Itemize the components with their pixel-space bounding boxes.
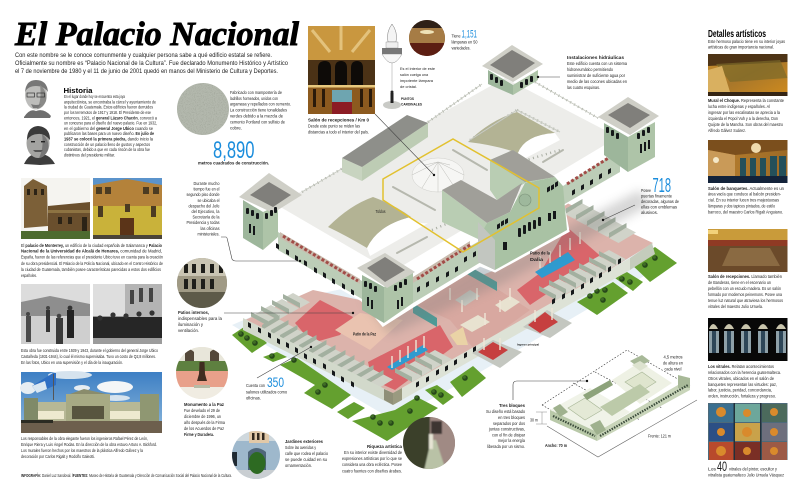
text: despacho del Ejecutivo: las oficinas bbox=[200, 226, 220, 231]
pools bbox=[387, 345, 428, 370]
caption: vitrales bbox=[708, 364, 781, 398]
text: instalaciones hidráulicas bbox=[567, 55, 627, 90]
stat: 40 vitrales: vitralista guatemalteco Julio Urruela Vásquez bbox=[708, 472, 784, 478]
balustrades bbox=[302, 82, 598, 263]
text: tres bloques: en tres bloques bbox=[498, 415, 526, 420]
label: altura por nivel: cada nivel bbox=[664, 366, 682, 372]
text: instalaciones hidráulicas: suministrar de suficiente agua por bbox=[567, 73, 625, 78]
stat: 1,151 lámparas: variedades. bbox=[452, 46, 470, 51]
photo: riqueza artística bbox=[403, 417, 455, 469]
cutaway illustration: ground floor bbox=[232, 199, 677, 441]
panel: historia: publicaron las bases para un nuevo diseño. En julio de bbox=[64, 131, 154, 136]
panel: historia: entonces, 1921, el general Lázaro Chacón, convocó a bbox=[64, 115, 157, 120]
text: monumento a la paz: año después de la Firma bbox=[184, 420, 225, 426]
title: El Palacio Nacional bbox=[14, 16, 300, 53]
front left wall bbox=[278, 232, 362, 299]
stat: 40 vitrales bbox=[708, 458, 784, 478]
rear rooms bbox=[261, 305, 288, 320]
caption: salón de banquetes: área vacía que conduce al balcón presiden- bbox=[708, 192, 781, 196]
caption: vitrales: orden, instrucción, fortaleza y progreso. bbox=[708, 394, 776, 398]
panel: historia bbox=[64, 86, 157, 157]
caption: salón de banquetes bbox=[708, 186, 785, 214]
text: despacho del Ejecutivo: Secretaría de la bbox=[192, 215, 220, 220]
photo: salón de recepciones bbox=[708, 229, 788, 272]
label: patio de la dalia: Dalia bbox=[530, 257, 544, 262]
panel: historia: un concurso para el diseño del nuevo palacio. Fue en 1932, bbox=[64, 121, 157, 126]
text: tres bloques: separados por dos bbox=[493, 421, 526, 426]
stat: 350 salones: Cuenta con bbox=[246, 383, 266, 388]
text: riqueza artística: En su interior existe diversidad de bbox=[344, 450, 402, 455]
panel: historia: en el gobierno del general Jorge Ubico cuando se bbox=[64, 126, 153, 131]
text: patios internos: Patios internos, bbox=[178, 310, 209, 315]
photo: fachada del Palacio Nacional bbox=[20, 371, 162, 433]
text: instalaciones hidráulicas: Este edificio cuenta con un sistema bbox=[567, 61, 627, 66]
photo: vitrales bbox=[708, 318, 788, 361]
text: despacho del Ejecutivo: del Ejecutivo, la bbox=[192, 209, 220, 214]
portrait: general Jorge Ubico bbox=[24, 126, 55, 165]
text: construcción 1939-1943 bbox=[21, 348, 158, 365]
cutaway illustration: upper floor bbox=[239, 45, 659, 335]
portrait: general Lázaro Chacón bbox=[24, 80, 51, 118]
dome bbox=[412, 158, 464, 192]
label: ingreso principal: Ingreso principal bbox=[517, 342, 539, 346]
photo: lámpara circle bbox=[409, 20, 445, 56]
text: construcción 1939-1943: En las fotos, Ubico en una supervisión y el día de la inauguración. bbox=[21, 360, 123, 365]
photo: Universidad de Alcalá bbox=[93, 178, 162, 239]
red corridors left bbox=[295, 300, 353, 343]
panel: historia: construcción de un palacio lleno de gustos y aspectos bbox=[64, 142, 151, 147]
text: construcción 1939-1943: Castañeda (1931-1944), lo cual él mismo supervisaba. Tuvo un costo de Q2,8 millones. bbox=[21, 354, 156, 359]
intro text: Con este nombre se le conoce comunmente y cualquier persona sabe a qué edificio estatal se refiere. bbox=[15, 52, 272, 59]
text: mampostería bbox=[230, 90, 291, 130]
diagram: small 3D model with dimensions bbox=[530, 350, 697, 457]
right wing rooms bbox=[395, 367, 422, 382]
photo: mural el Choque bbox=[708, 54, 788, 96]
diagram: small 3D model with dimensions: Frente: 121 m bbox=[648, 434, 671, 438]
intro text bbox=[15, 52, 289, 75]
slab shadow bbox=[362, 190, 650, 335]
label: altura por nivel bbox=[663, 354, 684, 372]
panel: historia: la ciudad de Guatemala. Estos edificios fueron derruidos bbox=[64, 105, 154, 110]
text: riqueza artística: expresiones artísticas por lo que se bbox=[342, 456, 402, 461]
photo: salón de recepciones km 0 bbox=[308, 26, 375, 114]
stat: 8,890: metros cuadrados de construcción. bbox=[198, 160, 269, 166]
stat: 40 vitrales: Los bbox=[708, 466, 717, 472]
text: instalaciones hidráulicas: las cuatro esquinas. bbox=[567, 85, 600, 90]
caption: vitrales: labor, justicia, peridad, concordancia, bbox=[708, 388, 772, 392]
text: mampostería: argamasa y repellados con cemento. bbox=[230, 102, 291, 107]
caption: salón de recepciones: vitrales del maestro Julio Urruela. bbox=[708, 304, 763, 309]
caption: salón de recepciones km 0 bbox=[308, 118, 370, 134]
main entrance bbox=[472, 308, 572, 368]
text: jardines exteriores: Jardines exteriores bbox=[285, 439, 324, 444]
stat: 8,890: 8,890 bbox=[213, 137, 254, 164]
caption: vitrales: relacionados con la herencia guatemalteca. bbox=[708, 370, 781, 375]
upper windows bbox=[276, 168, 611, 296]
toldos bbox=[328, 197, 411, 248]
text: riqueza artística bbox=[342, 444, 403, 474]
text: tres bloques: liberada por un sismo. bbox=[487, 444, 525, 449]
white cut outline bbox=[275, 75, 640, 325]
stat: 718 puertas: puertas finamente bbox=[641, 194, 673, 198]
footer credits: INFOGRAFÍA: Daniel Luz Sandoval. /FUENTES: Museo de Historia de Guatemala y Dirección de Comunicación Social del Palacio Nacional de la Cultura. bbox=[21, 473, 232, 478]
central block bbox=[442, 150, 567, 270]
text: patios internos: indispensables para la bbox=[178, 316, 223, 321]
text: patios internos: ventilación. bbox=[178, 328, 199, 333]
right corridors bbox=[517, 227, 607, 305]
caption: salón de recepciones bbox=[708, 274, 784, 309]
panel: detalles artísticos bbox=[708, 28, 788, 478]
caption: mural el Choque bbox=[708, 98, 784, 133]
text: jardines exteriores: se puede cuidad en su bbox=[285, 457, 328, 462]
hall bbox=[413, 270, 530, 350]
panel: historia: cubanistas, debido a que en cada rincón de la obra fue bbox=[64, 147, 150, 152]
text: tres bloques: juntas constructivas, bbox=[488, 426, 525, 432]
caption: vitrales: Los vitrales. Relatan acontecimientos bbox=[708, 364, 775, 369]
dimension labels: 30 m bbox=[530, 418, 538, 422]
caption: salón de recepciones: Salón de recepciones. Llamado también bbox=[708, 274, 783, 279]
left tower bbox=[239, 173, 302, 250]
stat: 350 salones: oficinas. bbox=[246, 396, 261, 400]
photo: salón de banquetes bbox=[708, 140, 788, 183]
text: construcción 1939-1943: Esta obra fue construida entre 1939 y 1943, durante el gobierno del general Jorge Ubico bbox=[21, 348, 158, 353]
text: monumento a la paz: Firme y Duradera. bbox=[184, 432, 214, 438]
text: jardines exteriores bbox=[285, 439, 328, 468]
label: altura por nivel: de altura en bbox=[663, 360, 684, 366]
text: despacho del Ejecutivo: segundo piso donde bbox=[186, 192, 220, 197]
label: puntos cardinales: PUNTOS bbox=[401, 97, 415, 101]
text: mampostería: cobre. bbox=[230, 126, 242, 130]
text: referencias bbox=[21, 243, 163, 278]
text: mampostería: La construcción tiene tonalidades bbox=[230, 108, 288, 112]
text: despacho del Ejecutivo: despacho del Jefe bbox=[188, 203, 220, 208]
caption: vitrales: banquetes representan las virtudes: paz, bbox=[708, 382, 777, 387]
text: responsables de la obra bbox=[21, 436, 157, 459]
text: riqueza artística: Riqueza artística bbox=[367, 444, 403, 449]
caption: mural el Choque: Mural el Choque. Representa la constante bbox=[708, 98, 784, 103]
text: lámpara de cristal: de cristal. bbox=[400, 84, 417, 89]
caption: salón de recepciones: tenue luz natural que atraviesa los hermosos bbox=[708, 298, 784, 303]
right tower bbox=[598, 97, 659, 172]
diagram: small 3D model with dimensions: Ancho: 70 m bbox=[545, 443, 567, 448]
stat: 1,151 lámparas: Tiene bbox=[452, 34, 461, 38]
text: monumento a la paz: Fue develado el 29 de bbox=[184, 408, 220, 414]
pavement tint bbox=[232, 232, 668, 420]
text: instalaciones hidráulicas: medio de las cocones ubicadas en bbox=[567, 79, 627, 84]
label: puntos cardinales bbox=[401, 97, 423, 106]
text: lámpara de cristal bbox=[400, 66, 435, 89]
text: mampostería: ladrillos horneados, unidos con bbox=[230, 96, 278, 101]
text: despacho del Ejecutivo: Presidencia y todas bbox=[186, 220, 220, 225]
roof slab bbox=[277, 78, 618, 272]
text: mampostería: verdes debido a la mezcla de bbox=[230, 114, 284, 118]
heading: detalles artísticos: Detalles artísticos bbox=[708, 28, 766, 40]
bottom tower bbox=[357, 253, 415, 323]
stat: 1,151 lámparas bbox=[452, 28, 478, 51]
label: altura por nivel: 4,5 metros bbox=[664, 354, 682, 360]
top tower bbox=[482, 45, 543, 95]
stat: 350 salones: salones utilizados como bbox=[246, 389, 288, 394]
text: jardines exteriores: calle que rodea el palacio bbox=[285, 451, 328, 456]
text: responsables de la obra: Los murales fueron hechos por los maestros de la plástica Alfredo Gálvez y la bbox=[21, 448, 143, 453]
text: riqueza artística: considera una obra ecléctica. Posee bbox=[342, 462, 402, 467]
stat: 350 salones: 350 bbox=[267, 374, 284, 390]
panel: historia: arquitectónica, se encontraba la cárcel y ayuntamiento de bbox=[64, 99, 156, 104]
skylight strips bbox=[393, 150, 563, 253]
text: tres bloques bbox=[486, 403, 526, 449]
leader lines bbox=[221, 76, 635, 400]
caption: salón de recepciones km 0: Salón de recepciones / Km 0 bbox=[308, 118, 370, 122]
stat: 350 salones bbox=[246, 374, 288, 400]
caption: vitrales: Otros vitrales, ubicados en el salón de bbox=[708, 376, 774, 381]
front walls bbox=[243, 318, 393, 405]
text: monumento a la paz: diciembre de 1996, un bbox=[184, 414, 221, 420]
stat: 1,151 lámparas: lámparas en 50 bbox=[452, 40, 478, 45]
text: patios internos: iluminación y bbox=[178, 322, 204, 327]
text: responsables de la obra: decoración por Carlos Rigalt y Rodolfo Galeotti. bbox=[21, 454, 95, 459]
photo: vitrales grid bbox=[708, 403, 788, 460]
caption: salón de banquetes: cial. En su interior lucen tres majestuosas bbox=[708, 198, 780, 202]
stat: 718 puertas: alusivos. bbox=[641, 210, 658, 215]
photo: stone texture circle bbox=[177, 83, 229, 135]
label: puntos cardinales: CARDINALES bbox=[401, 102, 423, 106]
caption: salón de recepciones: pebellón con un escudo madera. Es un salón bbox=[708, 286, 781, 291]
photo: día de la inauguración bbox=[93, 284, 162, 344]
text: jardines exteriores: Sobre las avenidas y bbox=[285, 445, 317, 450]
text: referencias: Nacional de la Universidad de Alcalá de Henares, comunidad de Madrid, bbox=[21, 248, 162, 254]
caption: salón de recepciones: formado por modernos peinemons. Posee una bbox=[708, 292, 782, 297]
caption: salón de banquetes: lámparas y dos tapices pintados, de estilo bbox=[708, 204, 775, 208]
stat: 40 vitrales: 40 bbox=[717, 458, 727, 474]
text: lámpara de cristal: salón cuelga una bbox=[400, 72, 429, 77]
floor slab bbox=[245, 203, 653, 403]
stat: 718 puertas: decoradas, algunas de bbox=[641, 199, 680, 204]
panel: detalles artísticos: Este hermoso palacio tiene en su interior joyas bbox=[708, 39, 786, 44]
caption: salón de banquetes: barroco, del maestro Carlos Rigalt Anguiano. bbox=[708, 210, 783, 214]
panel: historia: 1937 se colocó la primera piedra, dando inicio la bbox=[64, 136, 154, 142]
text: referencias: de su obra presidencial. El Palacio de la Policía Nacional, ubicado en el Centro Histórico de bbox=[21, 261, 163, 266]
heading: historia: Historia bbox=[64, 86, 93, 95]
label: patio de la paz: Patio de la Paz bbox=[353, 332, 376, 336]
text: tres bloques: Tres bloques bbox=[499, 403, 526, 408]
gardens bbox=[232, 247, 677, 441]
stat: 8,890 bbox=[198, 137, 269, 166]
text: monumento a la paz: Monumento a la Paz bbox=[184, 402, 225, 408]
text: referencias: España, fueron de las referencias que el presidente Ubico tuvo en cuenta para la creación bbox=[21, 254, 163, 260]
label: patio de la dalia: Patio de la bbox=[530, 250, 551, 256]
panel: historia: En el lugar donde hoy se encuentra esta joya bbox=[64, 94, 125, 99]
text: despacho del Ejecutivo: tiempo fue en el bbox=[194, 187, 220, 192]
text: despacho del Ejecutivo: Durante mucho bbox=[194, 181, 220, 186]
text: instalaciones hidráulicas: hidroneumático permitiendo bbox=[567, 67, 613, 72]
annex block bbox=[342, 115, 428, 181]
caption: mural el Choque: izquierda el Popol Vuh y a la derecha, Don bbox=[708, 116, 778, 121]
label: toldos: Toldos bbox=[376, 209, 386, 214]
yellow hexagon bbox=[383, 139, 539, 252]
teal walls bbox=[413, 303, 437, 327]
stat: 1,151 lámparas: 1,151 bbox=[462, 28, 477, 40]
icon: chandelier with human scale bbox=[382, 24, 402, 109]
text: mampostería: Fabricado con mampostería de bbox=[230, 90, 282, 95]
intro text: el 7 de noviembre de 1980 y el 11 de junio de 2001 quedó en manos del Ministerio de Cultura y Deportes. bbox=[15, 68, 278, 75]
photo: Ubico supervisando la obra bbox=[21, 284, 90, 344]
stat: 718 puertas: Posee bbox=[641, 188, 652, 193]
text: instalaciones hidráulicas: Instalaciones hidráulicas bbox=[567, 55, 625, 60]
photo: patios internos bbox=[177, 258, 227, 308]
photo: monumento a la paz bbox=[176, 347, 228, 399]
stat: 40 vitrales: vitrales del pintor, escultor y bbox=[729, 466, 778, 472]
text: mampostería: cemento Portland con sulfato de bbox=[230, 120, 285, 124]
front right wall bbox=[413, 240, 481, 303]
intro text: Oficialmente su nombre es “Palacio Nacional de la Cultura”. Fue declarado Monumento Histórico y Artístico bbox=[15, 60, 289, 67]
panel: historia: distintivos del presidente militar. bbox=[64, 152, 115, 157]
text: tres bloques: con el fin de disipar bbox=[492, 432, 525, 438]
text: lámpara de cristal: impotente lámpara bbox=[400, 78, 434, 83]
text: despacho del Ejecutivo: ministeriales. bbox=[198, 231, 220, 236]
caption: mural el Choque: ingresar por las escalinatas se aprecia a la bbox=[708, 110, 780, 115]
caption: salón de recepciones km 0: Desde este punto se miden las bbox=[308, 124, 361, 128]
stat: 718 puertas: ellas con emblemas bbox=[641, 204, 677, 210]
text: despacho del Ejecutivo: se ubicaba el bbox=[198, 198, 220, 203]
windows bbox=[248, 258, 621, 388]
text: referencias: españoles. bbox=[21, 273, 37, 278]
text: jardines exteriores: ornamentación. bbox=[285, 463, 312, 468]
text: referencias: la ciudad de Guatemala, también posee características parecidas a estos dos edificios bbox=[21, 267, 162, 272]
text: responsables de la obra: Enrique Riera y Luis Ángel Rodas. En la dirección de la obra estuvo Arturo A. Bickford. bbox=[21, 442, 157, 447]
columns bbox=[391, 232, 581, 368]
left wing rooms bbox=[262, 315, 289, 335]
text: patios internos bbox=[178, 310, 223, 333]
caption: salón de banquetes: Salón de banquetes. Actualmente es un bbox=[708, 186, 785, 191]
text: monumento a la paz bbox=[184, 402, 225, 438]
text: despacho del Ejecutivo bbox=[186, 181, 220, 236]
patio de la paz bbox=[335, 313, 403, 350]
panel: historia: por los terremotos de 1917 y 1918. El Presidente de ese bbox=[64, 110, 151, 115]
caption: mural el Choque: lucha entre indígenas y españoles. Al bbox=[708, 104, 770, 109]
photo: Palacio de Monterrey bbox=[21, 178, 90, 239]
text: responsables de la obra: Los responsables de la obra elegante fueron los ingenieros Rafael Pérez de León, bbox=[21, 436, 148, 441]
stat: 718 puertas bbox=[641, 175, 680, 215]
caption: mural el Choque: Alfredo Gálvez Suárez. bbox=[708, 128, 746, 133]
caption: salón de recepciones km 0: distancias a todo el interior del país. bbox=[308, 130, 369, 134]
panel: detalles artísticos: artísticas de gran importancia nacional. bbox=[708, 44, 774, 50]
text: lámpara de cristal: Es el interior de este bbox=[400, 66, 435, 71]
photo: jardines exteriores bbox=[232, 431, 280, 479]
base block left bbox=[550, 388, 630, 432]
text: monumento a la paz: de los Acuerdos de Paz bbox=[184, 426, 224, 432]
middle block bbox=[612, 362, 672, 404]
caption: salón de recepciones: de Banderas, tiene en el escenario un bbox=[708, 280, 771, 285]
stat: 718 puertas: 718 bbox=[652, 175, 671, 197]
label: patio de la dalia bbox=[530, 250, 551, 262]
text: referencias: El palacio de Monterrey, un edificio de la ciudad española de Salamanca y Palacio bbox=[21, 243, 162, 248]
text: riqueza artística: cuatro fuentes con diseños árabes. bbox=[342, 468, 402, 474]
text: tres bloques: mejor la energía bbox=[498, 438, 525, 443]
text: tres bloques: Su diseño está basado bbox=[486, 409, 525, 414]
caption: mural el Choque: Quijote de la Mancha. Son obras del maestro bbox=[708, 122, 783, 127]
